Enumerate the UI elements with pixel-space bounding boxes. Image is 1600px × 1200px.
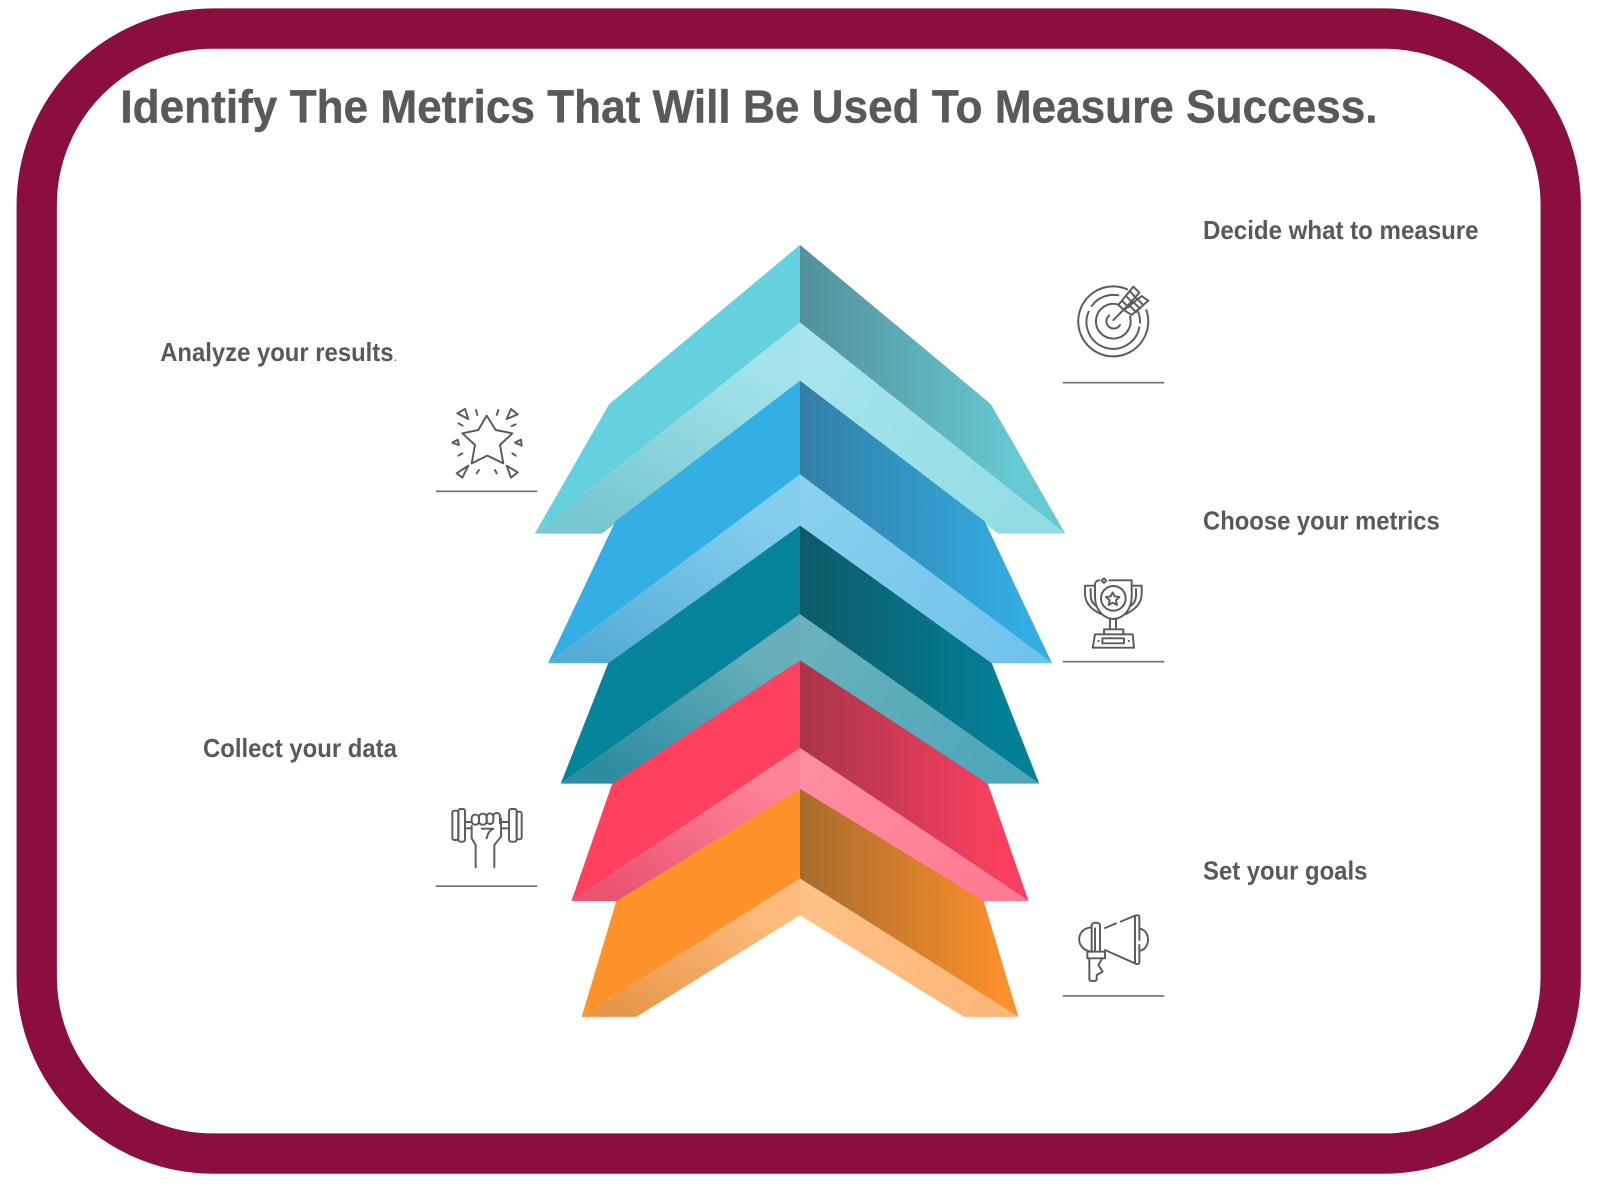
- divider: megaphone line: [1063, 995, 1164, 997]
- icon: megaphone: [1079, 915, 1148, 981]
- arrow: red layer: [571, 660, 1029, 901]
- arrow: orange bottom layer: [582, 789, 1018, 1017]
- divider: dumbbell line: [436, 885, 537, 887]
- arrow: dark teal layer: [561, 526, 1039, 784]
- arrow: teal top layer: [535, 245, 1065, 534]
- divider: trophy line: [1063, 661, 1164, 663]
- icon: star burst: [452, 409, 522, 478]
- label: choose your metrics: Choose your metrics: [1203, 508, 1440, 536]
- divider: star line: [436, 490, 537, 492]
- icon: trophy: [1085, 578, 1142, 648]
- divider: target line: [1063, 382, 1164, 384]
- arrow: blue layer: [548, 381, 1052, 663]
- label: collect your data: Collect your data: [203, 735, 398, 763]
- icon: dumbbell in fist: [452, 809, 522, 867]
- icon: target with arrow: [1078, 286, 1148, 356]
- label: set your goals: Set your goals: [1203, 858, 1367, 886]
- label: decide what to measure: Decide what to measure: [1203, 217, 1479, 245]
- label: analyze your results: Analyze your results.: [160, 339, 397, 367]
- title: Identify The Metrics That Will Be Used To Measure Success.: [120, 80, 1378, 132]
